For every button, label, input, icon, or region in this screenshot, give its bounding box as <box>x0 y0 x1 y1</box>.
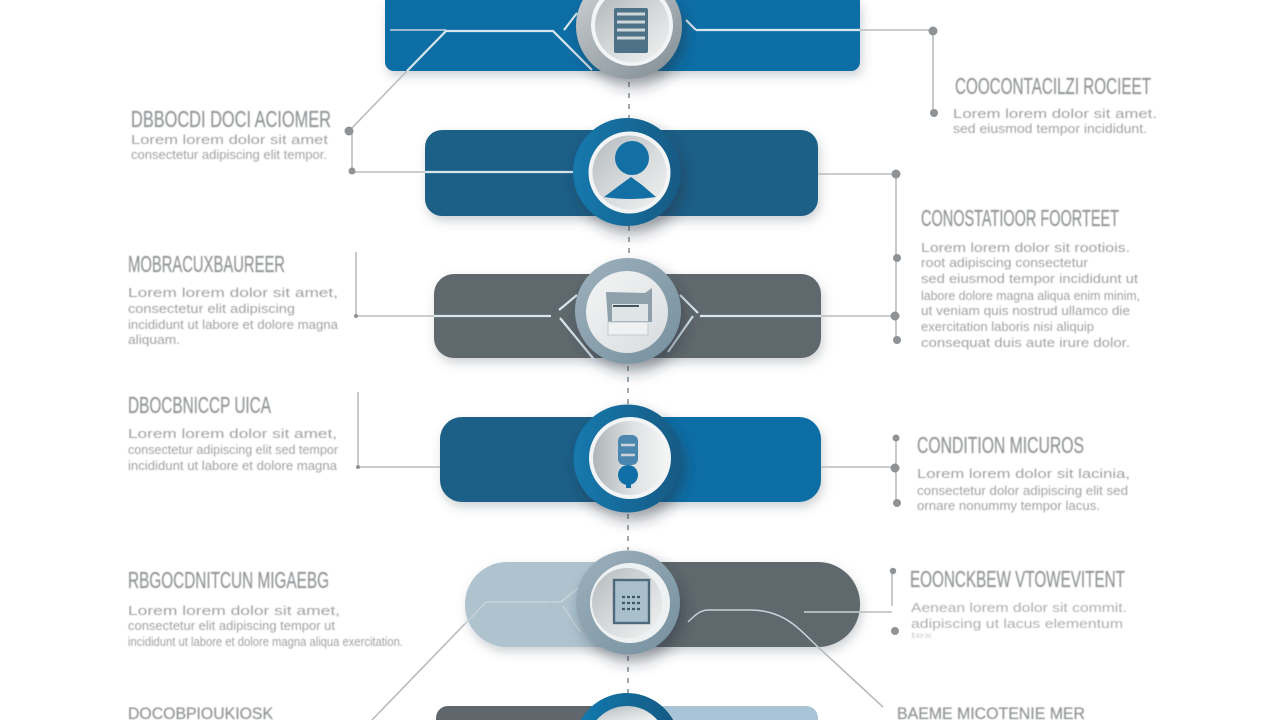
text: left block 2: consectetur elit adipiscing <box>128 302 295 316</box>
text: right block 4: adipiscing ut lacus elementum <box>911 617 1123 631</box>
text: right block 2: Lorem lorem dolor sit rootiois. <box>921 241 1130 255</box>
step 1 medallion <box>576 0 682 79</box>
icon: framed tablet <box>614 580 649 623</box>
step 2 medallion <box>573 118 681 226</box>
step 6 bar <box>436 706 818 720</box>
connector dots <box>344 26 938 635</box>
icon: person <box>604 141 656 199</box>
text: right block 3: consectetur dolor adipiscing elit sed <box>917 484 1128 498</box>
step 3 medallion <box>575 258 681 364</box>
text: left block 2: Lorem lorem dolor sit amet, <box>128 286 338 300</box>
text: right block 1 <box>953 73 1157 136</box>
text: right block 2: labore dolore magna aliqua enim minim, <box>921 289 1140 303</box>
left text blocks <box>128 106 403 720</box>
right text blocks <box>897 73 1157 720</box>
icon: printer document <box>606 288 652 335</box>
text: right block 1: Lorem lorem dolor sit amet. <box>953 107 1157 121</box>
text: left block 3: incididunt ut labore et dolore magna <box>128 459 337 473</box>
text: left block 1: Lorem lorem dolor sit amet <box>131 133 329 147</box>
text: left block 4: RBGOCDNITCUN MIGAEBG <box>128 567 329 593</box>
step 1 bar <box>385 0 860 71</box>
step 5 medallion <box>576 550 680 654</box>
text: left block 3: DBOCBNICCP UICA <box>128 392 271 418</box>
text: right block 4: Aenean lorem dolor sit commit. <box>911 601 1127 615</box>
text: right block 2: exercitation laboris nisi aliquip <box>921 320 1094 334</box>
text: right block 2: ut veniam quis nostrud ullamco die <box>921 304 1130 318</box>
connector lines <box>349 13 933 720</box>
central dashed spine <box>628 82 629 694</box>
text: left block 2: MOBRACUXBAUREER <box>128 251 285 277</box>
step 4 bar <box>440 417 821 502</box>
text: right block 2 <box>921 205 1140 350</box>
text: right block 3 <box>917 432 1130 513</box>
text: right block 2: root adipiscing consectetur <box>921 256 1088 270</box>
text: left block 3: Lorem lorem dolor sit amet, <box>128 427 337 441</box>
step 2 bar <box>425 130 818 216</box>
text: right block 2: CONOSTATIOOR FOORTEET <box>921 205 1119 231</box>
text: left block 4: Lorem lorem dolor sit amet, <box>128 604 340 618</box>
text: left block 3 <box>128 392 338 473</box>
text: right block 2: consequat duis aute irure dolor. <box>921 336 1130 350</box>
text: left block 4: consectetur elit adipiscing tempor ut <box>128 619 336 633</box>
text: right block 3: CONDITION MICUROS <box>917 432 1084 458</box>
step 6 medallion <box>581 693 673 720</box>
text: right block 1: sed eiusmod tempor incididunt. <box>953 122 1147 136</box>
text: left block 2: aliquam. <box>128 333 180 347</box>
text: right block 4: EOONCKBEW VTOWEVITENT <box>910 566 1125 592</box>
step 4 medallion <box>574 404 682 512</box>
text: left block 1: DBBOCDI DOCI ACIOMER <box>131 106 331 132</box>
text: left block 4 <box>128 567 403 649</box>
text: left block 1 <box>131 106 331 162</box>
text: left block 2 <box>128 251 338 347</box>
text: left block 1: consectetur adipiscing elit tempor. <box>131 148 327 162</box>
step 3 bar <box>434 274 821 358</box>
icon: vertical capsule <box>618 435 638 488</box>
text: right block 3: ornare nonummy tempor lacus. <box>917 499 1100 513</box>
icon: document stack <box>614 8 648 53</box>
text: left block 3: consectetur adipiscing elit sed tempor <box>128 443 338 457</box>
text: right block 4: tex <box>911 631 932 640</box>
step 5 bar <box>465 562 860 647</box>
text: right block 2: sed eiusmod tempor incididunt ut <box>921 272 1139 286</box>
text: right block 1: COOCONTACILZI ROCIEET <box>955 73 1151 99</box>
text: right block 4 <box>910 566 1127 640</box>
text: right block 3: Lorem lorem dolor sit lacinia, <box>917 467 1130 481</box>
text: left block 4: incididunt ut labore et dolore magna aliqua exercitation. <box>128 635 403 649</box>
text: left block 2: incididunt ut labore et dolore magna <box>128 318 338 332</box>
